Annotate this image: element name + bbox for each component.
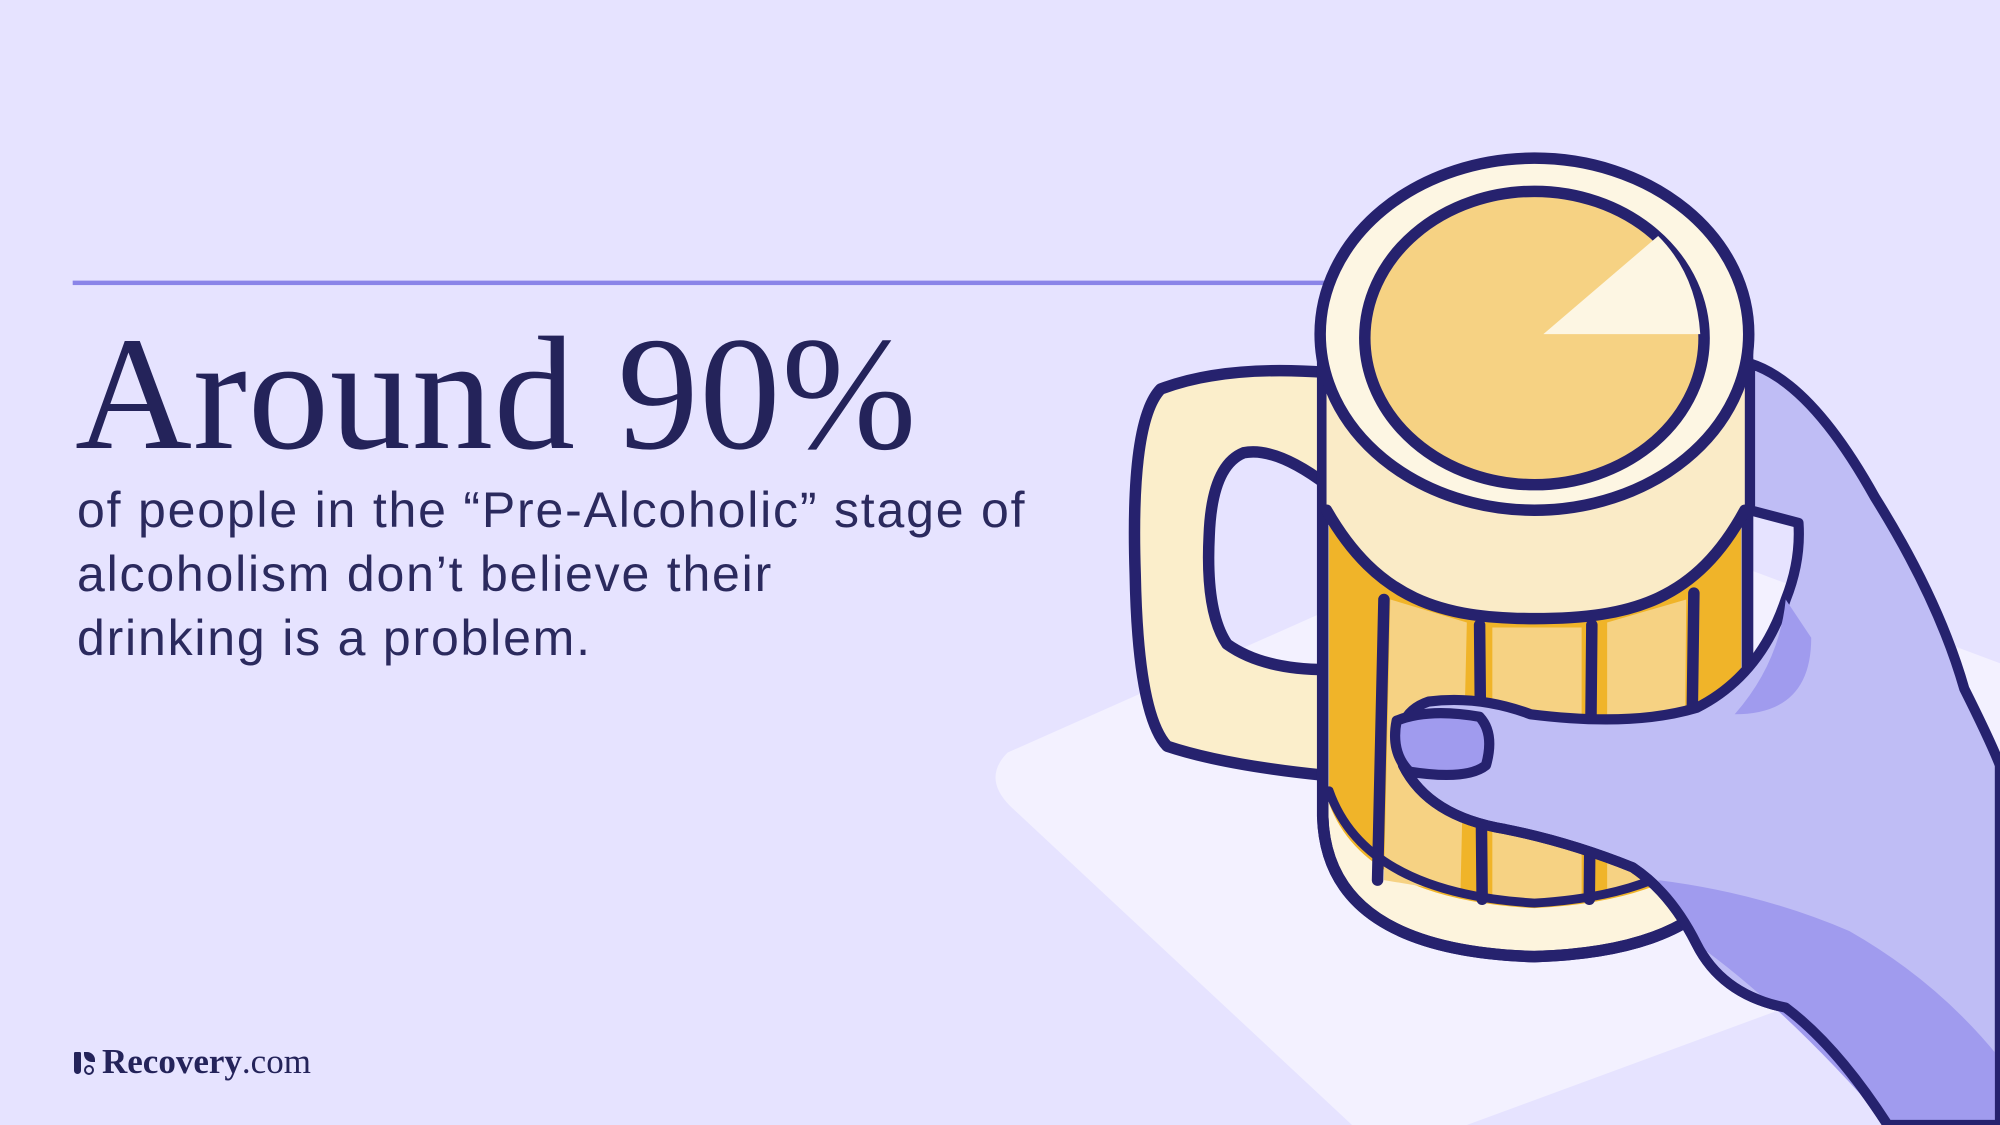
mug handle [1134, 371, 1327, 776]
mug [1134, 158, 1749, 957]
body text: drinking is a problem. [77, 610, 592, 666]
logo: Recovery.com [102, 1042, 311, 1081]
beer surface [1365, 191, 1704, 485]
hand [1395, 364, 2000, 1125]
title: Around 90% [75, 305, 917, 484]
mug body [1323, 338, 1747, 957]
accent line [73, 281, 1490, 285]
body text: of people in the “Pre-Alcoholic” stage of [77, 482, 1026, 538]
mug rim and foam [1320, 158, 1749, 619]
table surface [996, 536, 2000, 1125]
thumbnail [1395, 713, 1489, 775]
body text: alcoholism don’t believe their [77, 546, 773, 602]
body text [77, 482, 1026, 666]
icon: logo mark [74, 1052, 95, 1075]
